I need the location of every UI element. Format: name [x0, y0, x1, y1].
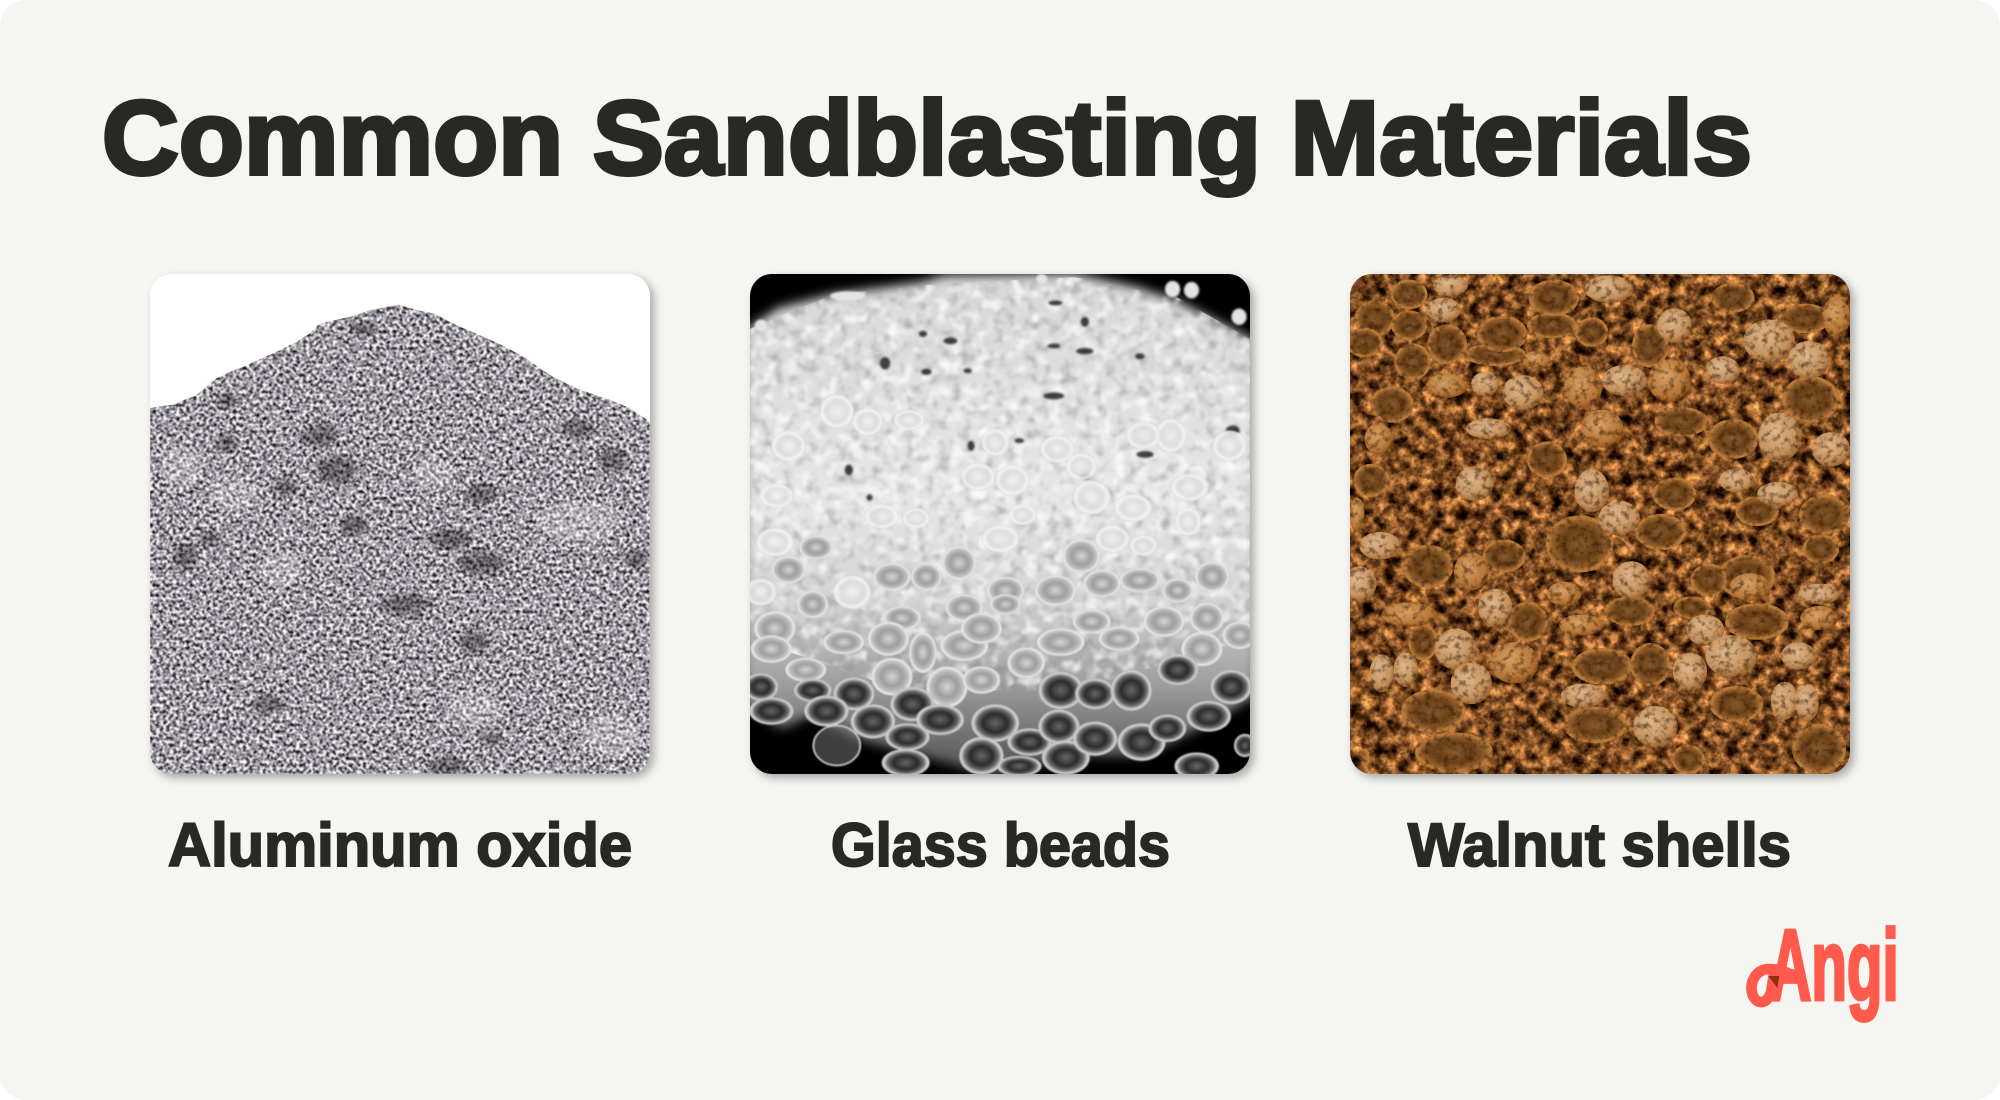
pale shell halves	[1342, 275, 1850, 747]
label: aluminum oxide: Aluminum oxide	[168, 811, 632, 879]
stray top beads	[755, 274, 1247, 331]
dark beads	[744, 654, 1256, 780]
light beads	[746, 394, 1247, 609]
logo: Angi	[1746, 909, 1899, 1023]
panel: glass beads	[748, 272, 1260, 879]
mid beads	[751, 535, 1257, 708]
hollow bead	[813, 726, 860, 765]
photo: glass beads pile	[750, 274, 1250, 774]
photo: walnut shells heap	[1350, 274, 1850, 774]
label: walnut shells: Walnut shells	[1408, 811, 1791, 879]
label: glass beads: Glass beads	[831, 811, 1170, 879]
dark gaps between beads	[845, 301, 1240, 501]
panel: walnut shells	[1348, 272, 1860, 879]
title: Common Sandblasting Materials	[102, 80, 1752, 197]
photo: aluminum oxide powder pile	[150, 274, 650, 774]
whole darker shell halves	[1349, 296, 1850, 683]
panel: aluminum oxide	[148, 272, 660, 879]
empty shell cups	[1347, 281, 1848, 773]
